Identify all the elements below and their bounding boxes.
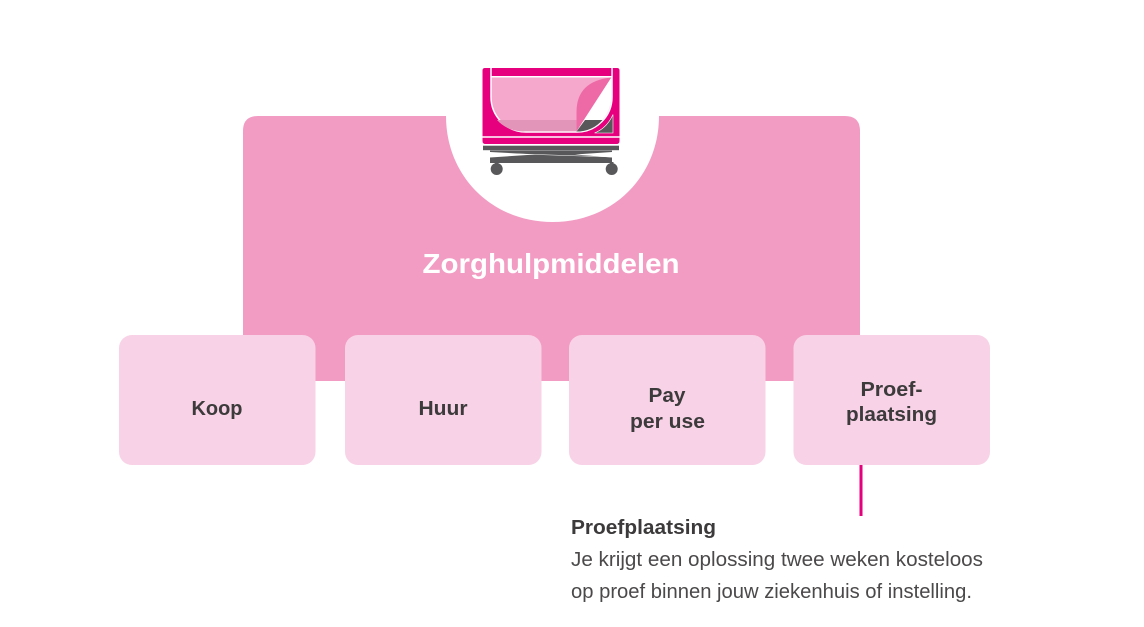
card: Koop (119, 335, 316, 465)
card: Pay per use: Pay (648, 385, 686, 407)
card: Huur: Huur (418, 398, 468, 420)
heading: Zorghulpmiddelen: Zorghulpmiddelen (422, 248, 680, 279)
card: Pay per use: per use (630, 411, 705, 433)
icon: hospital bed (482, 68, 620, 175)
card: Huur (345, 335, 542, 465)
text block: Proefplaatsing description: Proefplaatsing (571, 517, 716, 539)
card: Proefplaatsing (794, 335, 990, 465)
card: Koop: Koop (192, 398, 242, 420)
text block: Proefplaatsing description (571, 517, 983, 603)
text block: Proefplaatsing description: Je krijgt een oplossing twee weken kosteloos (571, 549, 983, 571)
card: Pay per use (569, 335, 766, 465)
main panel: Zorghulpmiddelen (243, 116, 860, 381)
connector line (860, 465, 862, 516)
card: Proefplaatsing: plaatsing (846, 404, 937, 426)
text block: Proefplaatsing description: op proef binnen jouw ziekenhuis of instelling. (571, 581, 972, 603)
card: Proefplaatsing: Proef- (860, 379, 922, 401)
